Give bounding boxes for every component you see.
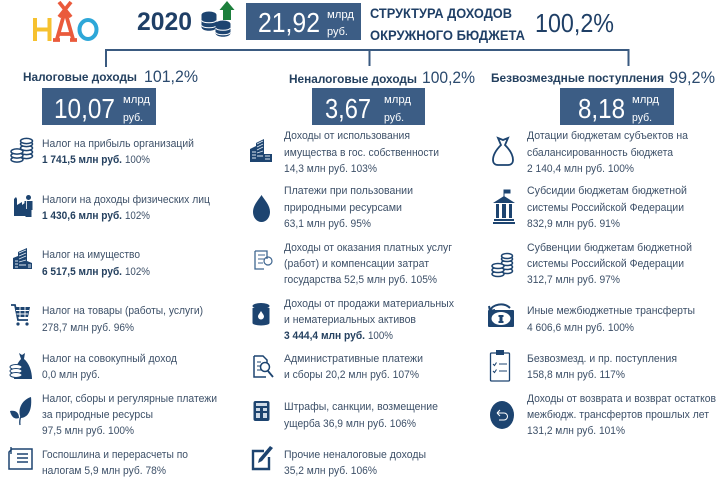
item: state property income: 14,3 млн руб. 103% — [284, 163, 377, 175]
item: paid services income: государства 52,5 млн руб. 105% — [284, 274, 437, 286]
icon: drop — [253, 195, 270, 222]
item: balance subsidies — [527, 130, 689, 175]
item: state property income — [284, 130, 439, 175]
item: asset sales income: 100% — [368, 330, 393, 342]
icon: coins — [492, 254, 512, 276]
item: administrative payments: Административные платежи — [284, 353, 423, 365]
amount box: non-tax income: 3,67 — [325, 93, 371, 124]
icon: buildings — [13, 248, 32, 269]
amount box: tax income: млрд — [123, 94, 151, 106]
icon: calculator — [254, 401, 270, 421]
panel: grants — [488, 69, 716, 437]
item: goods tax — [42, 305, 203, 334]
item: subventions: системы Российской Федерации — [527, 258, 684, 270]
item: paid services income: Доходы от оказания платных услуг — [284, 242, 452, 254]
icon: government building — [493, 190, 515, 224]
item: asset sales income — [284, 298, 454, 342]
item: property tax — [42, 249, 150, 278]
item: subsidies: Субсидии бюджетам бюджетной — [527, 185, 687, 197]
item: other non-tax income: 35,2 млн руб. 106% — [284, 465, 377, 477]
item: paid services income: (работ) и компенсации затрат — [284, 258, 429, 270]
item: profit tax: Налог на прибыль организаций — [42, 138, 194, 150]
logo: НАО — [35, 2, 96, 41]
item: gratuitous receipts — [527, 353, 677, 381]
title: ОКРУЖНОГО БЮДЖЕТА — [370, 28, 525, 43]
amount box: tax income: 10,07 — [54, 93, 115, 124]
heading: tax income — [23, 68, 198, 86]
total amount box: 21,92 — [258, 7, 320, 38]
item: natural resource payments — [284, 185, 413, 230]
item: subsidies: 832,9 млн руб. 91% — [527, 218, 620, 230]
item: goods tax: Налог на товары (работы, услуги) — [42, 305, 203, 317]
item: fines: ущерба 36,9 млн руб. 106% — [284, 418, 416, 430]
item: personal income tax: Налоги на доходы физических лиц — [42, 194, 210, 206]
icon: coins with green arrow — [202, 1, 234, 37]
item: personal income tax — [42, 194, 210, 222]
amount box: non-tax income: млрд — [384, 94, 412, 106]
amount box: non-tax income — [312, 88, 425, 125]
item: personal income tax: 1 430,6 млн руб. — [42, 210, 122, 222]
icon: checklist — [490, 350, 510, 381]
item: natural resources tax: Налог, сборы и регулярные платежи — [42, 393, 217, 405]
icon: cart — [11, 305, 30, 326]
icon: note — [9, 447, 32, 469]
item: property tax: 102% — [125, 266, 150, 278]
item: subsidies: системы Российской Федерации — [527, 202, 684, 214]
item: natural resource payments: Платежи при пользовании — [284, 185, 413, 197]
heading: grants — [491, 69, 715, 87]
panel: non-tax income — [250, 69, 475, 477]
item: gratuitous receipts: Безвозмезд. и пр. поступления — [527, 353, 677, 365]
item: aggregate income tax: Налог на совокупный доход — [42, 353, 177, 365]
item: asset sales income: и нематериальных активов — [284, 314, 416, 326]
item: state duty: Госпошлина и перерасчеты по — [42, 449, 188, 461]
item: fines — [284, 401, 438, 430]
item: natural resource payments: природными ресурсами — [284, 202, 402, 214]
item: returned transfers — [527, 393, 716, 437]
amount box: grants — [560, 88, 674, 125]
amount box: tax income — [42, 88, 156, 125]
item: natural resource payments: 63,1 млн руб. 95% — [284, 218, 371, 230]
heading: grants: Безвозмездные поступления — [491, 71, 664, 85]
heading: tax income: Налоговые доходы — [23, 70, 137, 84]
item: returned transfers: межбюдж. трансфертов прошлых лет — [527, 409, 709, 421]
item: natural resources tax — [42, 393, 217, 437]
item: state property income: имущества в гос. собственности — [284, 147, 439, 159]
item: other transfers: 4 606,6 млн руб. 100% — [527, 322, 634, 334]
item: balance subsidies: 2 140,4 млн руб. 100% — [527, 163, 634, 175]
item: subventions: Субвенции бюджетам бюджетной — [527, 242, 692, 254]
amount box: non-tax income: руб. — [384, 112, 404, 124]
heading: tax income: 101,2% — [144, 68, 198, 86]
item: other transfers: Иные межбюджетные трансферты — [527, 305, 695, 317]
item: natural resources tax: за природные ресурсы — [42, 409, 153, 421]
item: state duty: налогам 5,9 млн руб. 78% — [42, 465, 166, 477]
icon: factory and person — [14, 195, 32, 217]
title — [370, 6, 525, 43]
item: natural resources tax: 97,5 млн руб. 100% — [42, 425, 134, 437]
icon: buildings — [250, 139, 272, 162]
item: returned transfers: 131,2 млн руб. 101% — [527, 425, 625, 437]
item: property tax: Налог на имущество — [42, 249, 140, 261]
item: asset sales income: 3 444,4 млн руб. — [284, 330, 365, 342]
item: subsidies — [527, 185, 687, 230]
icon: barrel — [252, 303, 270, 326]
item: paid services income — [284, 242, 452, 286]
connector bracket — [106, 50, 628, 67]
icon: coins — [11, 138, 32, 162]
icon: money bag with coins — [10, 353, 32, 379]
amount box: tax income: руб. — [123, 112, 143, 124]
icon: return arrow in circle — [490, 401, 514, 429]
amount box: grants: 8,18 — [578, 93, 625, 124]
heading: grants: 99,2% — [669, 69, 715, 87]
item: state duty — [42, 449, 188, 477]
heading: non-tax income: 100,2% — [422, 69, 475, 87]
amount box: grants: руб. — [632, 112, 652, 124]
amount box: grants: млрд — [632, 94, 660, 106]
icon: document with magnifier — [254, 356, 273, 377]
item: fines: Штрафы, санкции, возмещение — [284, 401, 438, 413]
item: administrative payments: и сборы 20,2 млн руб. 107% — [284, 369, 419, 381]
item: profit tax — [42, 138, 194, 166]
total amount box: млрд — [327, 9, 355, 21]
total amount box — [246, 3, 361, 40]
item: property tax: 6 517,5 млн руб. — [42, 266, 122, 278]
item: balance subsidies: сбалансированность бюджета — [527, 147, 674, 159]
item: profit tax: 1 741,5 млн руб. — [42, 154, 122, 166]
year: 2020 — [137, 8, 192, 36]
item: gratuitous receipts: 158,8 млн руб. 117% — [527, 369, 625, 381]
item: administrative payments — [284, 353, 423, 381]
icon: pencil and pad — [253, 446, 273, 469]
heading: non-tax income: Неналоговые доходы — [289, 72, 417, 86]
item: aggregate income tax: 0,0 млн руб. — [42, 369, 100, 381]
item: other non-tax income — [284, 449, 426, 477]
item: asset sales income: Доходы от продажи материальных — [284, 298, 454, 310]
total percent: 100,2% — [535, 8, 614, 38]
icon: clipboard with check — [255, 251, 272, 269]
icon: banknote with arrow — [488, 304, 514, 327]
panel: tax income — [9, 68, 217, 477]
heading: non-tax income — [289, 69, 475, 87]
item: state property income: Доходы от использования — [284, 130, 410, 142]
total amount box: руб. — [327, 26, 348, 38]
item: subventions: 312,7 млн руб. 97% — [527, 274, 620, 286]
item: other transfers — [527, 305, 695, 334]
icon: leaf — [10, 397, 31, 425]
item: goods tax: 278,7 млн руб. 96% — [42, 322, 134, 334]
item: personal income tax: 102% — [125, 210, 150, 222]
item: profit tax: 100% — [125, 154, 150, 166]
item: subventions — [527, 242, 692, 286]
item: aggregate income tax — [42, 353, 177, 381]
icon: money bag outline — [493, 138, 513, 165]
item: other non-tax income: Прочие неналоговые доходы — [284, 449, 426, 461]
item: balance subsidies: Дотации бюджетам субъектов на — [527, 130, 689, 142]
title: СТРУКТУРА ДОХОДОВ — [370, 6, 512, 21]
